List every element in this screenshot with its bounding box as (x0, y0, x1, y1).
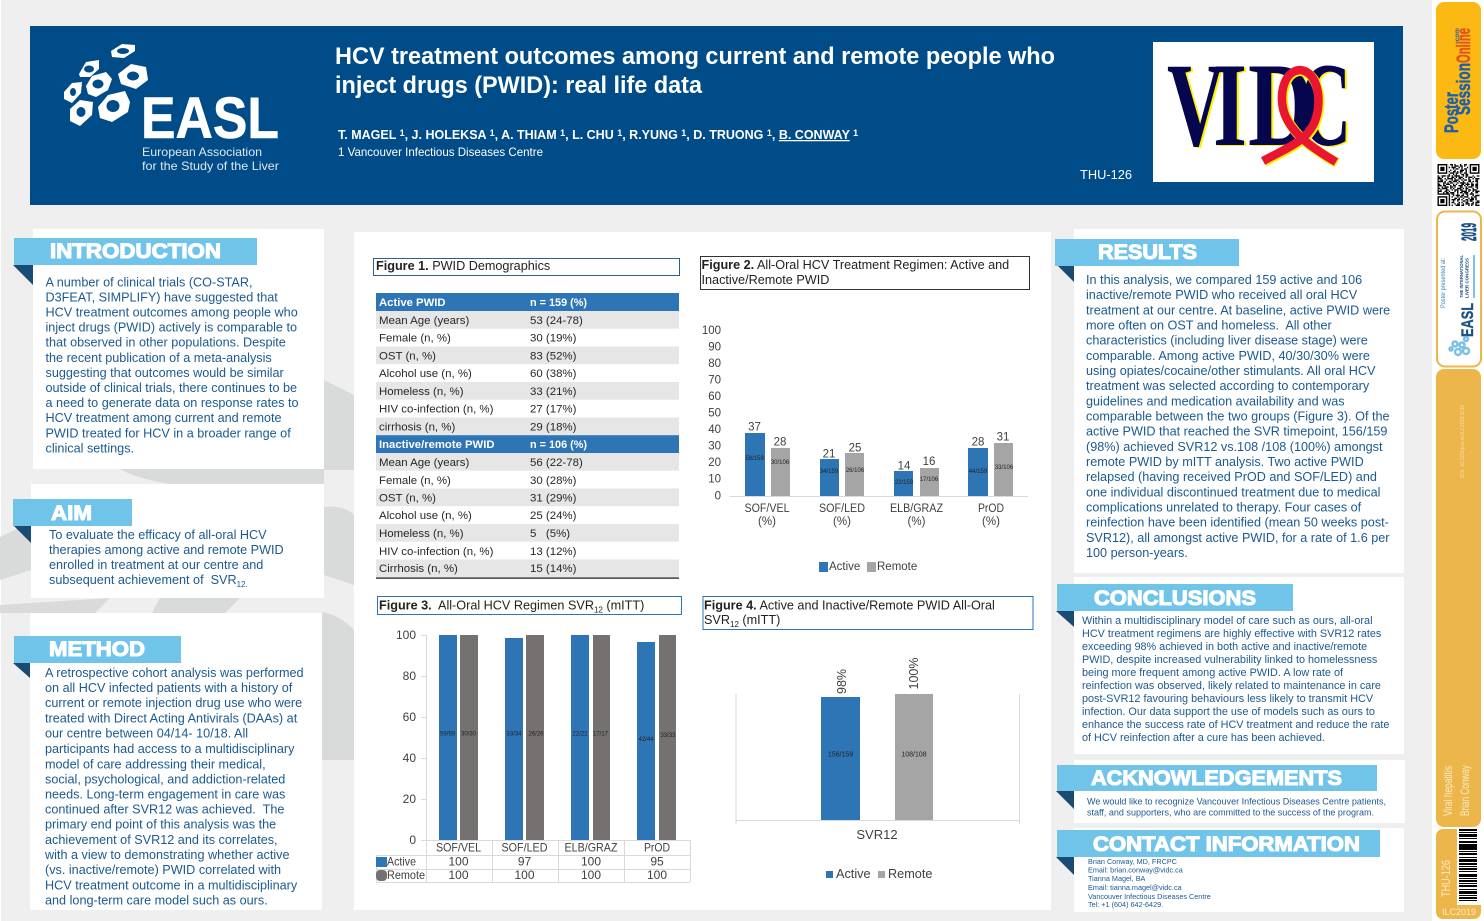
text: results: comparable. Among active PWID, 40/30/30% were (1086, 349, 1370, 363)
bar chart: treatment regimen: 100 (702, 325, 721, 337)
bar chart: regimen SVR12 with data table: 17/17 (593, 732, 609, 738)
bar chart: treatment regimen: SOF/VEL (744, 503, 790, 515)
text: conclusions: reinfection was observed, likely related to maintenance in care (1082, 680, 1381, 692)
authors: , J. HOLEKSA (405, 128, 490, 142)
bar chart: treatment regimen: 34/159 (820, 469, 839, 475)
bar chart: regimen SVR12 with data table: 42/44 (638, 737, 654, 743)
legend (376, 854, 425, 882)
table: PWID demographics: n = 106 (%) (530, 439, 587, 451)
panel: conclusions (1056, 577, 1404, 754)
bar chart: regimen SVR12 with data table: 33/34 (506, 732, 522, 738)
ribbon heading: introduction: INTRODUCTION (50, 240, 221, 263)
bar chart: treatment regimen: 44/159 (969, 469, 988, 475)
text: introduction: HCV treatment among current and remote (46, 411, 282, 425)
text: results: treatment at our centre. At baseline, active PWID were (1086, 303, 1390, 317)
table: PWID demographics: 25 (24%) (530, 510, 577, 522)
icon: VIDC logo: C (1302, 39, 1353, 172)
bar chart: treatment regimen: 70 (708, 374, 721, 386)
bar chart: treatment regimen: 59/159 (745, 456, 764, 462)
panel: contact information (1056, 828, 1404, 912)
table: PWID demographics: Active PWID (379, 297, 446, 309)
ribbon heading: introduction (14, 238, 257, 265)
bar chart: treatment regimen: (%) (982, 516, 1000, 528)
text: aim: enrolled in treatment at our centre and (49, 558, 263, 572)
text: contact information (1088, 857, 1211, 909)
poster number: THU-126 (1080, 167, 1132, 182)
ribbon heading: conclusions (1057, 584, 1293, 611)
bar chart: regimen SVR12 with data table: 20 (403, 792, 416, 806)
sidebar: presented at EASL 2019 (1437, 212, 1481, 366)
heading: figure 4: (mITT) (739, 613, 780, 627)
bar chart: treatment regimen: (%) (758, 516, 776, 528)
icon: VIDC logo: D (1248, 38, 1314, 171)
sidebar: session details: DOI: 10.3252/pso.eu.ILC2019.2019 (1460, 405, 1466, 478)
text: results: using opiates/cocaine/other stimulants. All oral HCV (1086, 364, 1376, 378)
text: conclusions: being more frequent among active PWID. A low rate of (1082, 667, 1344, 679)
bar chart: overall SVR12: 98% (835, 669, 849, 694)
bar chart: overall SVR12: 108/108 (901, 752, 927, 758)
text: conclusions: PWID, despite increased vulnerability linked to homelessness (1082, 654, 1378, 666)
authors: 1 (560, 128, 565, 138)
table: PWID demographics: OST (n, %) (379, 350, 436, 362)
sidebar: poster session online: .com (1455, 28, 1461, 43)
icon: VIDC logo: C (1300, 38, 1351, 171)
text: acknowledgements: We would like to recognize Vancouver Infectious Diseases Centre patients, (1087, 796, 1386, 807)
icon: EASL logo: for the Study of the Liver (142, 159, 279, 173)
icon: VIDC logo: V (1169, 39, 1227, 172)
legend (819, 561, 917, 573)
text: contact information: Brian Conway, MD, FRCPC (1088, 857, 1177, 866)
legend: Active (836, 867, 871, 881)
table: PWID demographics: HIV co-infection (n, %) (379, 404, 494, 416)
text: conclusions: exceeding 98% achieved in both active and inactive/remote (1082, 641, 1367, 653)
text: conclusions: HCV treatment regimens are highly effective with SVR12 rates (1082, 628, 1382, 640)
text: results: relapsed (having received PrOD and SOF/LED) and (1086, 470, 1377, 484)
bar chart: regimen SVR12 with data table: 100 (581, 854, 601, 868)
text: contact information: Vancouver Infectious Diseases Centre (1088, 892, 1211, 901)
panel: figures (354, 232, 1051, 910)
bar chart: treatment regimen: 33/106 (995, 465, 1014, 471)
table: PWID demographics: Mean Age (years) (379, 457, 469, 469)
table: PWID demographics: n = 159 (%) (530, 297, 587, 309)
bar chart: treatment regimen: 21 (823, 448, 835, 460)
table: PWID demographics: Cirrhosis (n, %) (379, 563, 458, 575)
authors: T. MAGEL (338, 128, 396, 142)
ribbon heading: acknowledgements: ACKNOWLEDGEMENTS (1091, 767, 1342, 790)
bar chart: treatment regimen: 90 (708, 342, 721, 354)
sidebar: poster session online: Poster (1442, 92, 1463, 133)
title: HCV treatment outcomes among current and remote people who (335, 43, 1055, 70)
table: PWID demographics: Alcohol use (n, %) (379, 510, 472, 522)
text: introduction: inject drugs (PWID) actively is comparable to (46, 321, 297, 335)
text: introduction: HCV treatment outcomes among people who (46, 306, 298, 320)
sidebar: session details: Viral hepatitis (1441, 766, 1455, 816)
bar chart: regimen SVR12 with data table: 100 (448, 868, 469, 882)
text: results: more often on OST and homeless. All other (1086, 318, 1332, 332)
panel: aim (13, 484, 324, 598)
text: results: one individual discontinued treatment due to medical (1086, 485, 1380, 499)
sidebar: session details (1436, 369, 1481, 827)
legend: Active (387, 854, 416, 868)
text: method: and long-term care model such as ours. (45, 893, 268, 907)
authors: 1 (490, 128, 495, 138)
bar chart: treatment regimen: 28 (972, 436, 984, 448)
ribbon heading: method (14, 636, 181, 663)
bar chart: treatment regimen: 40 (708, 424, 721, 436)
ribbon heading: method: METHOD (49, 638, 145, 661)
bar chart: treatment regimen: 37 (748, 422, 761, 434)
bar chart: treatment regimen: 60 (708, 391, 721, 403)
table: PWID demographics: 83 (52%) (530, 350, 577, 362)
table: PWID demographics: Female (n, %) (379, 332, 451, 344)
text: contact information: Email: tianna.magel@vidc.ca (1088, 883, 1183, 892)
text: method: participants had access to a multidisciplinary (45, 742, 295, 756)
sidebar: presented at EASL 2019: Poster presented at: (1440, 258, 1447, 308)
bar chart: treatment regimen: 16 (923, 456, 935, 468)
bar chart: regimen SVR12 with data table: 59/59 (440, 732, 456, 738)
text: acknowledgements (1087, 796, 1386, 818)
bar chart: treatment regimen: 14 (898, 460, 911, 472)
text: method: with a view to demonstrating whether active (44, 848, 290, 862)
table: PWID demographics: Homeless (n, %) (379, 386, 464, 398)
text: method: HCV treatment outcome in a multidisciplinary (45, 878, 298, 892)
ribbon heading: contact information (1057, 830, 1380, 857)
bar chart: treatment regimen: SOF/LED (819, 503, 865, 515)
text: aim (49, 528, 284, 589)
text: conclusions: Within a multidisciplinary model of care such as ours, all-oral (1082, 615, 1372, 627)
text: method: current or remote injection drug use who were (45, 696, 302, 710)
text: results: reinfection have been identified (mean 50 weeks post- (1086, 516, 1389, 530)
authors: 1 (767, 128, 772, 138)
bar chart: treatment regimen: 50 (708, 408, 721, 420)
sidebar: poster session online: Session (1454, 63, 1475, 115)
ribbon heading: acknowledgements (1057, 765, 1377, 791)
bar chart: overall SVR12: SVR12 (856, 827, 898, 842)
text: results: 100 person-years. (1086, 546, 1188, 560)
text: results: active PWID that reached the SVR timepoint, 156/159 (1086, 425, 1387, 439)
ribbon fold (14, 526, 31, 543)
text: introduction: outside of clinical trials, there continues to be (46, 381, 297, 395)
text: results: treatment was selected according to contemporary (1086, 379, 1370, 393)
text: results: inactive/remote PWID who received all oral HCV (1086, 288, 1358, 302)
icon: barcode (1459, 829, 1477, 901)
affiliation: 1 Vancouver Infectious Diseases Centre (338, 145, 543, 159)
text: conclusions: post-SVR12 favouring behaviours less likely to transmit HCV (1082, 693, 1374, 705)
bar chart: regimen SVR12 with data table: PrOD (644, 840, 670, 854)
text: contact information: Tianna Magel, BA (1088, 874, 1146, 883)
heading: figure 2 (700, 256, 1030, 290)
bar chart: treatment regimen (702, 325, 1028, 573)
bar chart: treatment regimen: 25 (849, 442, 861, 454)
icon: VIDC logo: I (1213, 38, 1247, 171)
sidebar: session details: Brian Conway (1458, 765, 1472, 816)
icon: EASL logo (64, 44, 279, 173)
table: PWID demographics: 31 (29%) (530, 492, 577, 504)
icon: VIDC logo: I (1215, 39, 1249, 172)
text: contact information: Tel: +1 (604) 642-6429. (1088, 900, 1163, 909)
text: conclusions: of HCV reinfection after a cure has been achieved. (1082, 732, 1325, 744)
bar chart: treatment regimen: 10 (708, 474, 721, 486)
text: acknowledgements: staff, and supporters, who are committed to the success of the program. (1087, 807, 1374, 818)
heading: figure 4: 12 (730, 620, 739, 629)
bar chart: treatment regimen: 17/106 (920, 477, 939, 483)
sidebar: presented at EASL 2019: THE INTERNATIONAL (1459, 255, 1464, 298)
bar chart: regimen SVR12 with data table: 26/26 (528, 732, 544, 738)
table: PWID demographics: 60 (38%) (530, 368, 577, 380)
table: PWID demographics: 53 (24-78) (530, 315, 583, 327)
bar chart: treatment regimen: 31 (997, 432, 1009, 444)
panel: method (13, 613, 322, 910)
bar chart: treatment regimen: 80 (708, 358, 721, 370)
bar chart: regimen SVR12 with data table: SOF/LED (502, 840, 548, 854)
bar chart: overall SVR12 (736, 658, 1020, 881)
bar chart: overall SVR12: 156/159 (828, 752, 853, 758)
text: aim: 12. (237, 580, 248, 589)
text: method: primary end point of this analysis was the (45, 818, 276, 832)
text: aim: therapies among active and remote PWID (49, 543, 284, 557)
text: method: on all HCV infected patients with a history of (45, 681, 293, 695)
text: introduction: the recent publication of a meta-analysis (46, 351, 272, 365)
table: PWID demographics: 30 (28%) (530, 475, 577, 487)
icon: EASL logo: EASL (141, 86, 279, 151)
text: introduction: a need to generate data on response rates to (46, 396, 298, 410)
sidebar: presented at EASL 2019: LIVER CONGRESS (1464, 258, 1470, 298)
ribbon heading: aim: AIM (51, 502, 92, 525)
bar chart: regimen SVR12 with data table: 100 (647, 868, 667, 882)
authors: 1 (617, 128, 622, 138)
ribbon fold (1056, 791, 1074, 809)
heading: figure 1: Figure 1. PWID Demographics (376, 259, 550, 273)
table: PWID demographics: 29 (18%) (530, 422, 577, 434)
table: PWID demographics: Alcohol use (n, %) (379, 368, 472, 380)
table: PWID demographics: cirrhosis (n, %) (379, 422, 455, 434)
text: method: (vs. inactive/remote) PWID correlated with (45, 863, 281, 877)
table: PWID demographics: 5 (5%) (530, 528, 570, 540)
text: results: comparable between the two groups (Figure 3). Of the (1086, 410, 1390, 424)
bar chart: regimen SVR12 with data table: 100 (396, 628, 416, 642)
authors: 1 (853, 128, 858, 138)
sidebar: presented at EASL 2019: 2019 (1458, 223, 1481, 241)
header banner (30, 26, 1403, 205)
text: results: remote PWID by mITT analysis. Two active PWID (1086, 455, 1364, 469)
text: conclusions: enhance the success rate of HCV treatment and reduce the rate (1082, 719, 1389, 731)
table: PWID demographics: 56 (22-78) (530, 457, 583, 469)
bar chart: regimen SVR12 with data table (376, 628, 691, 883)
bar chart: overall SVR12: 100% (907, 658, 921, 690)
authors: , D. TRUONG (686, 128, 767, 142)
text: results: In this analysis, we compared 159 active and 106 (1086, 273, 1362, 287)
text: introduction: clinical settings. (46, 441, 134, 455)
text: introduction: A number of clinical trials (CO-STAR, (46, 275, 252, 289)
legend: Remote (888, 867, 932, 881)
bar chart: regimen SVR12 with data table: ELB/GRAZ (564, 840, 618, 854)
legend (826, 867, 932, 881)
sidebar: poster session online: Online (1454, 28, 1475, 63)
bar chart: regimen SVR12 with data table: 22/22 (572, 732, 588, 738)
text: introduction (46, 275, 298, 455)
bar chart: treatment regimen: 20 (708, 457, 721, 469)
text: method: our centre between 04/14- 10/18. All (45, 726, 248, 740)
bar chart: treatment regimen: 30 (708, 440, 721, 452)
bar chart: treatment regimen: (%) (908, 516, 926, 528)
ribbon heading: aim (13, 499, 132, 526)
legend: Remote (387, 868, 425, 882)
sidebar: barcode tag: THU-126 (1439, 860, 1453, 897)
icon: EASL logo: European Association (142, 145, 262, 159)
text: introduction: D3FEAT, SIMPLIFY) have suggested that (46, 290, 278, 304)
table: PWID demographics: 27 (17%) (530, 404, 577, 416)
ribbon heading: results: RESULTS (1098, 241, 1197, 264)
ribbon fold (13, 663, 30, 678)
text: method: treated with Direct Acting Antivirals (DAAs) at (45, 711, 298, 725)
text: results: complications unrelated to therapy. Four cases of (1086, 500, 1362, 514)
table: PWID demographics (376, 293, 679, 579)
table: PWID demographics: OST (n, %) (379, 492, 436, 504)
title (335, 43, 1055, 99)
sidebar: presented at EASL 2019: EASL (1458, 303, 1477, 337)
sidebar: barcode tag (1436, 828, 1483, 919)
bar chart: regimen SVR12 with data table: 100 (448, 854, 469, 868)
authors: , L. CHU (565, 128, 617, 142)
bar chart: regimen SVR12 with data table: 40 (403, 751, 416, 765)
bar chart: regimen SVR12 with data table: 30/30 (461, 732, 477, 738)
bar chart: regimen SVR12 with data table: 60 (403, 710, 416, 724)
heading: figure 3 (378, 596, 682, 614)
bar chart: treatment regimen: (%) (833, 516, 851, 528)
table: PWID demographics: HIV co-infection (n, %) (379, 546, 494, 558)
title: inject drugs (PWID): real life data (335, 72, 703, 99)
heading: figure 3: 12 (594, 606, 603, 614)
ribbon heading: conclusions: CONCLUSIONS (1094, 587, 1256, 610)
heading: figure 2: Figure 2. All-Oral HCV Treatment Regimen: Active and (702, 258, 1009, 272)
panel: acknowledgements (1056, 760, 1405, 823)
text: method: model of care addressing their medical, (45, 757, 266, 771)
legend: Remote (877, 561, 917, 573)
text: contact information: Email: brian.conway@vidc.ca (1088, 866, 1184, 875)
bar chart: regimen SVR12 with data table: 100 (581, 868, 601, 882)
heading: figure 1 (374, 258, 680, 276)
text: introduction: PWID treated for HCV in a broader range of (46, 426, 291, 440)
bar chart: treatment regimen: PrOD (978, 503, 1004, 515)
table: PWID demographics: Inactive/remote PWID (379, 439, 495, 451)
sidebar: barcode tag: ILC2019 (1442, 907, 1476, 917)
bar chart: treatment regimen: 26/106 (846, 468, 865, 474)
bar chart: regimen SVR12 with data table: 0 (409, 833, 416, 847)
icon: VIDC logo: V (1167, 38, 1225, 171)
table: PWID demographics: Mean Age (years) (379, 315, 469, 327)
text: method: A retrospective cohort analysis was performed (45, 666, 304, 680)
bar chart: treatment regimen: 28 (774, 436, 786, 448)
bar chart: treatment regimen: 22/159 (895, 480, 914, 486)
heading: figure 2: Inactive/Remote PWID (702, 273, 829, 287)
authors: , R.YUNG (622, 128, 681, 142)
ribbon fold (13, 265, 33, 285)
bar chart: regimen SVR12 with data table: 100 (514, 868, 535, 882)
bar chart: treatment regimen: 0 (715, 490, 721, 502)
text: conclusions (1082, 615, 1389, 744)
ribbon heading: results (1055, 239, 1239, 266)
table: PWID demographics: Female (n, %) (379, 475, 451, 487)
heading: figure 4 (703, 596, 1033, 630)
ribbon fold (1056, 611, 1074, 627)
table: PWID demographics: 33 (21%) (530, 386, 577, 398)
text: method: achievement of SVR12 and its correlates, (45, 833, 278, 847)
panel: results (1055, 229, 1404, 573)
panel: introduction (13, 229, 324, 469)
authors: , A. THIAM (495, 128, 560, 142)
text: aim: To evaluate the efficacy of all-oral HCV (49, 528, 267, 542)
text: conclusions: infection. Our data support the use of models such as ours to (1082, 706, 1375, 718)
icon: QR code (1438, 164, 1480, 206)
heading: figure 3: Figure 3. All-Oral HCV Regimen SVR (379, 598, 594, 612)
text: results: guidelines and medication availability and was (1086, 394, 1345, 408)
table: PWID demographics: Homeless (n, %) (379, 528, 464, 540)
text: introduction: that observed in other populations. Despite (46, 336, 286, 350)
text: method: continued after SVR12 was achieved. The (45, 803, 284, 817)
text: results: SVR12), all amongst active PWID, for a rate of 1.6 per (1086, 531, 1390, 545)
table: PWID demographics: 15 (14%) (530, 563, 577, 575)
icon: VIDC logo (1153, 38, 1374, 182)
authors: , (772, 128, 779, 142)
bar chart: regimen SVR12 with data table: 95 (650, 854, 664, 868)
heading: figure 4: Figure 4. Active and Inactive/Remote PWID All-Oral (704, 598, 995, 612)
ribbon heading: contact information: CONTACT INFORMATION (1093, 833, 1360, 856)
legend: Active (829, 561, 860, 573)
bar chart: treatment regimen: ELB/GRAZ (890, 503, 943, 515)
text: method: social, psychological, and addiction-related (45, 772, 285, 786)
sidebar: poster session online (1436, 2, 1481, 159)
text: results: characteristics (including liver disease stage) were (1086, 334, 1368, 348)
heading: figure 3: (mITT) (603, 598, 644, 612)
authors: 1 (681, 128, 686, 138)
text: introduction: suggesting that outcomes would be similar (46, 366, 284, 380)
heading: figure 4: SVR (704, 613, 730, 627)
text: method: needs. Long-term engagement in care was (45, 788, 285, 802)
ribbon fold (1058, 266, 1074, 282)
text: results (1086, 273, 1390, 560)
text: aim: subsequent achievement of SVR (49, 573, 237, 587)
table: PWID demographics: 13 (12%) (530, 546, 577, 558)
bar chart: regimen SVR12 with data table: SOF/VEL (436, 840, 481, 854)
bar chart: regimen SVR12 with data table: 97 (518, 854, 531, 868)
text: method (44, 666, 304, 907)
bar chart: treatment regimen: 30/106 (771, 460, 790, 466)
ribbon fold (1056, 857, 1074, 875)
table: PWID demographics: 30 (19%) (530, 332, 577, 344)
bar chart: regimen SVR12 with data table: 80 (403, 669, 416, 683)
bar chart: regimen SVR12 with data table: 33/33 (660, 733, 676, 739)
icon: VIDC logo: D (1250, 39, 1316, 172)
text: results: (98%) achieved SVR12 vs.108 /108 (100%) amongst (1086, 440, 1383, 454)
authors: B. CONWAY (779, 128, 851, 142)
authors: 1 (400, 128, 405, 138)
